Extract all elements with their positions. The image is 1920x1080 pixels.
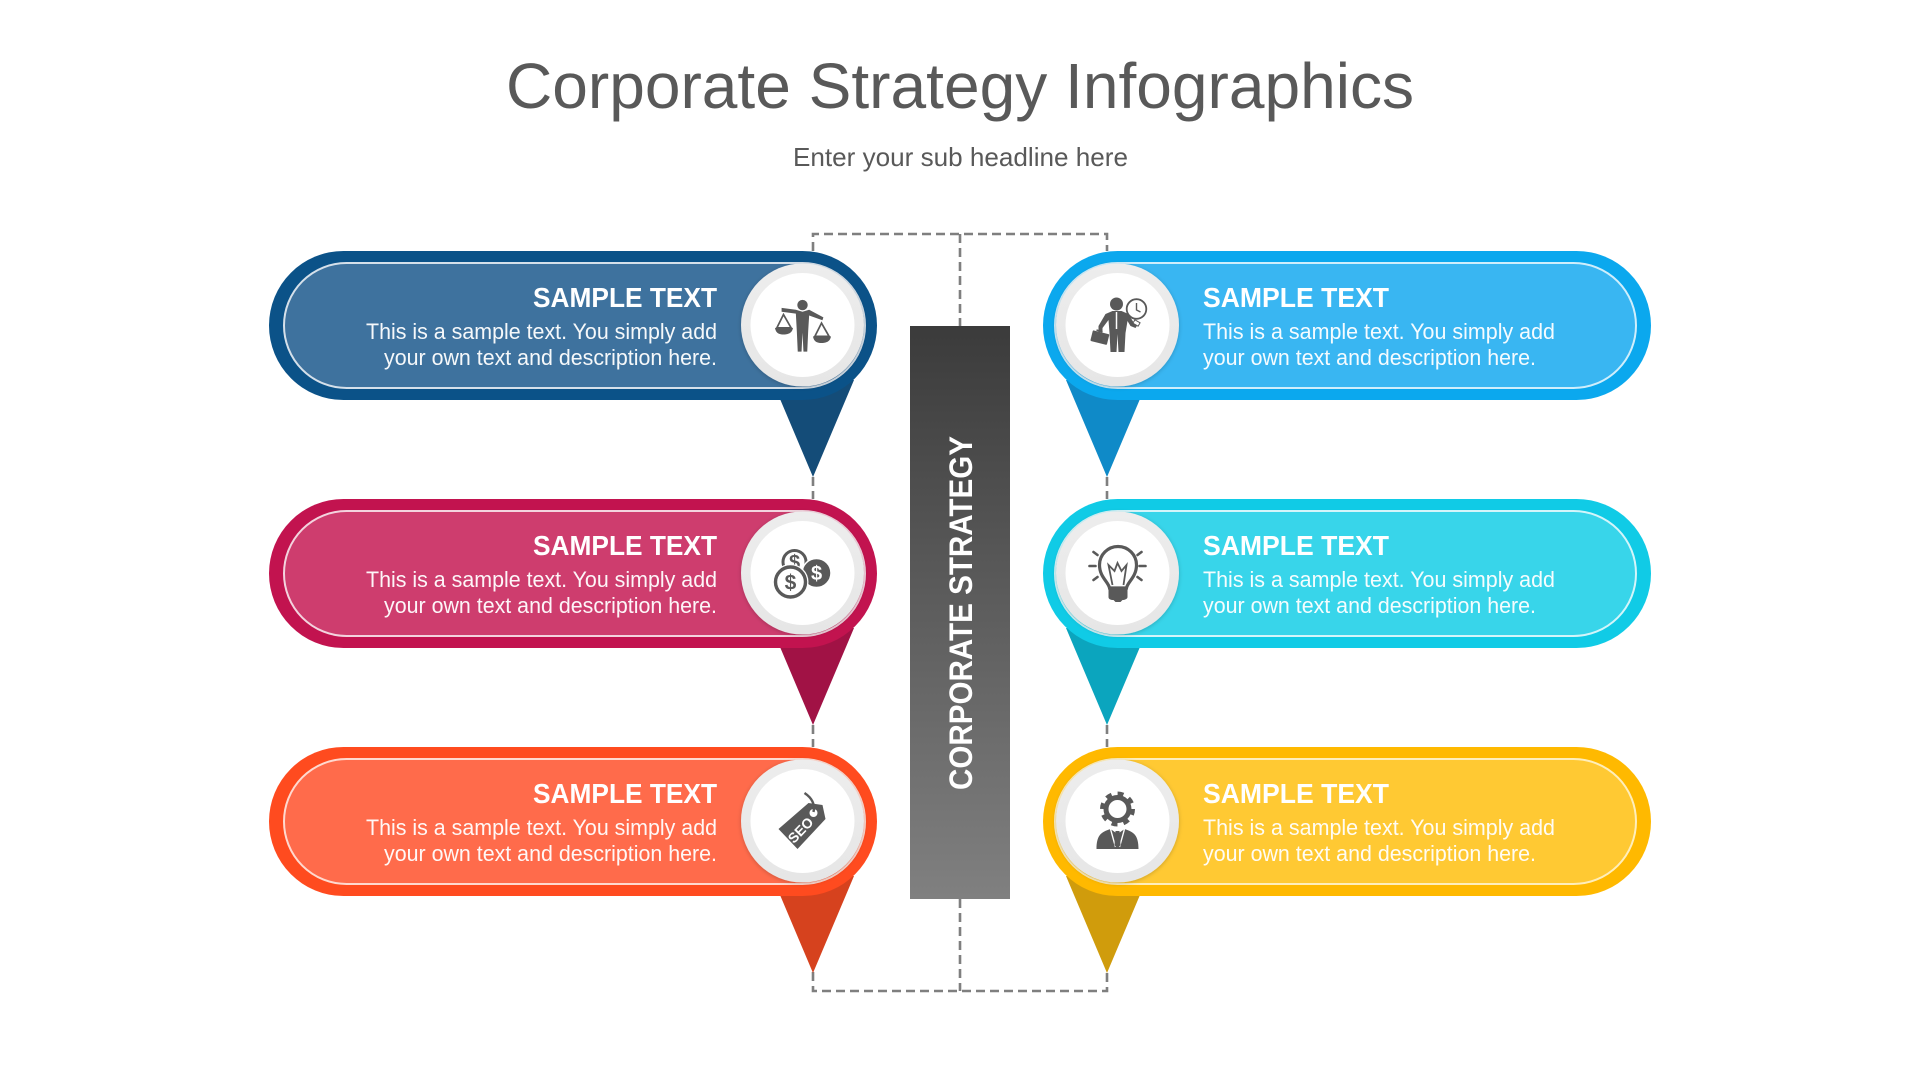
inner pill — [1055, 759, 1636, 884]
body text — [1203, 319, 1555, 370]
panel: top right card — [1043, 251, 1651, 477]
body text: This is a sample text. You simply add — [366, 567, 717, 592]
outer pill — [269, 499, 877, 648]
pointer — [772, 628, 854, 725]
icon badge: businessman with clock — [1056, 264, 1179, 386]
pointer — [772, 876, 854, 973]
pointer — [1066, 628, 1148, 725]
pointer — [772, 380, 854, 477]
body text: This is a sample text. You simply add — [366, 815, 717, 840]
panel: middle right card — [1043, 499, 1651, 725]
body text: This is a sample text. You simply add — [1203, 815, 1555, 840]
heading: SAMPLE TEXT — [533, 778, 717, 809]
pointer — [1066, 876, 1148, 973]
inner pill — [284, 263, 865, 388]
icon badge: coins: $ — [785, 572, 797, 594]
subtitle: Enter your sub headline here — [793, 142, 1128, 172]
pointer — [1066, 380, 1148, 477]
body text: This is a sample text. You simply add — [366, 319, 717, 344]
inner pill — [284, 511, 865, 636]
heading: SAMPLE TEXT — [1203, 778, 1389, 809]
icon badge: SEO tag: SEO — [784, 814, 817, 846]
outer pill — [269, 747, 877, 896]
body text — [366, 815, 717, 866]
body text: your own text and description here. — [1203, 345, 1536, 370]
heading: SAMPLE TEXT — [533, 282, 717, 313]
outer pill — [269, 251, 877, 400]
body text: your own text and description here. — [1203, 593, 1536, 618]
inner pill — [284, 759, 865, 884]
heading: SAMPLE TEXT — [1203, 530, 1389, 561]
icon badge: coins: $ — [789, 552, 800, 574]
icon badge: coins: $ — [811, 563, 822, 585]
icon badge: coins — [741, 512, 864, 634]
outer pill — [1043, 499, 1651, 648]
central bar — [910, 326, 1010, 899]
body text — [366, 319, 717, 370]
body text — [366, 567, 717, 618]
inner pill — [1055, 511, 1636, 636]
icon badge: light bulb — [1056, 512, 1179, 634]
inner pill — [1055, 263, 1636, 388]
body text: This is a sample text. You simply add — [1203, 567, 1555, 592]
body text: your own text and description here. — [1203, 841, 1536, 866]
body text: your own text and description here. — [384, 345, 717, 370]
dashed connector lines — [813, 234, 1107, 991]
icon badge: gear-head businessman — [1056, 760, 1179, 882]
panel: bottom right card — [1043, 747, 1651, 973]
outer pill — [1043, 251, 1651, 400]
body text: your own text and description here. — [384, 841, 717, 866]
heading: SAMPLE TEXT — [1203, 282, 1389, 313]
panel: middle left card — [269, 499, 877, 725]
icon badge: businessman with scales — [741, 264, 864, 386]
body text: This is a sample text. You simply add — [1203, 319, 1555, 344]
title: Corporate Strategy Infographics — [506, 50, 1414, 122]
body text — [1203, 815, 1555, 866]
panel: bottom left card — [269, 747, 877, 973]
heading: SAMPLE TEXT — [533, 530, 717, 561]
panel: top left card — [269, 251, 877, 477]
icon badge: SEO tag — [741, 760, 864, 882]
body text: your own text and description here. — [384, 593, 717, 618]
outer pill — [1043, 747, 1651, 896]
body text — [1203, 567, 1555, 618]
bar label: CORPORATE STRATEGY — [943, 436, 979, 790]
